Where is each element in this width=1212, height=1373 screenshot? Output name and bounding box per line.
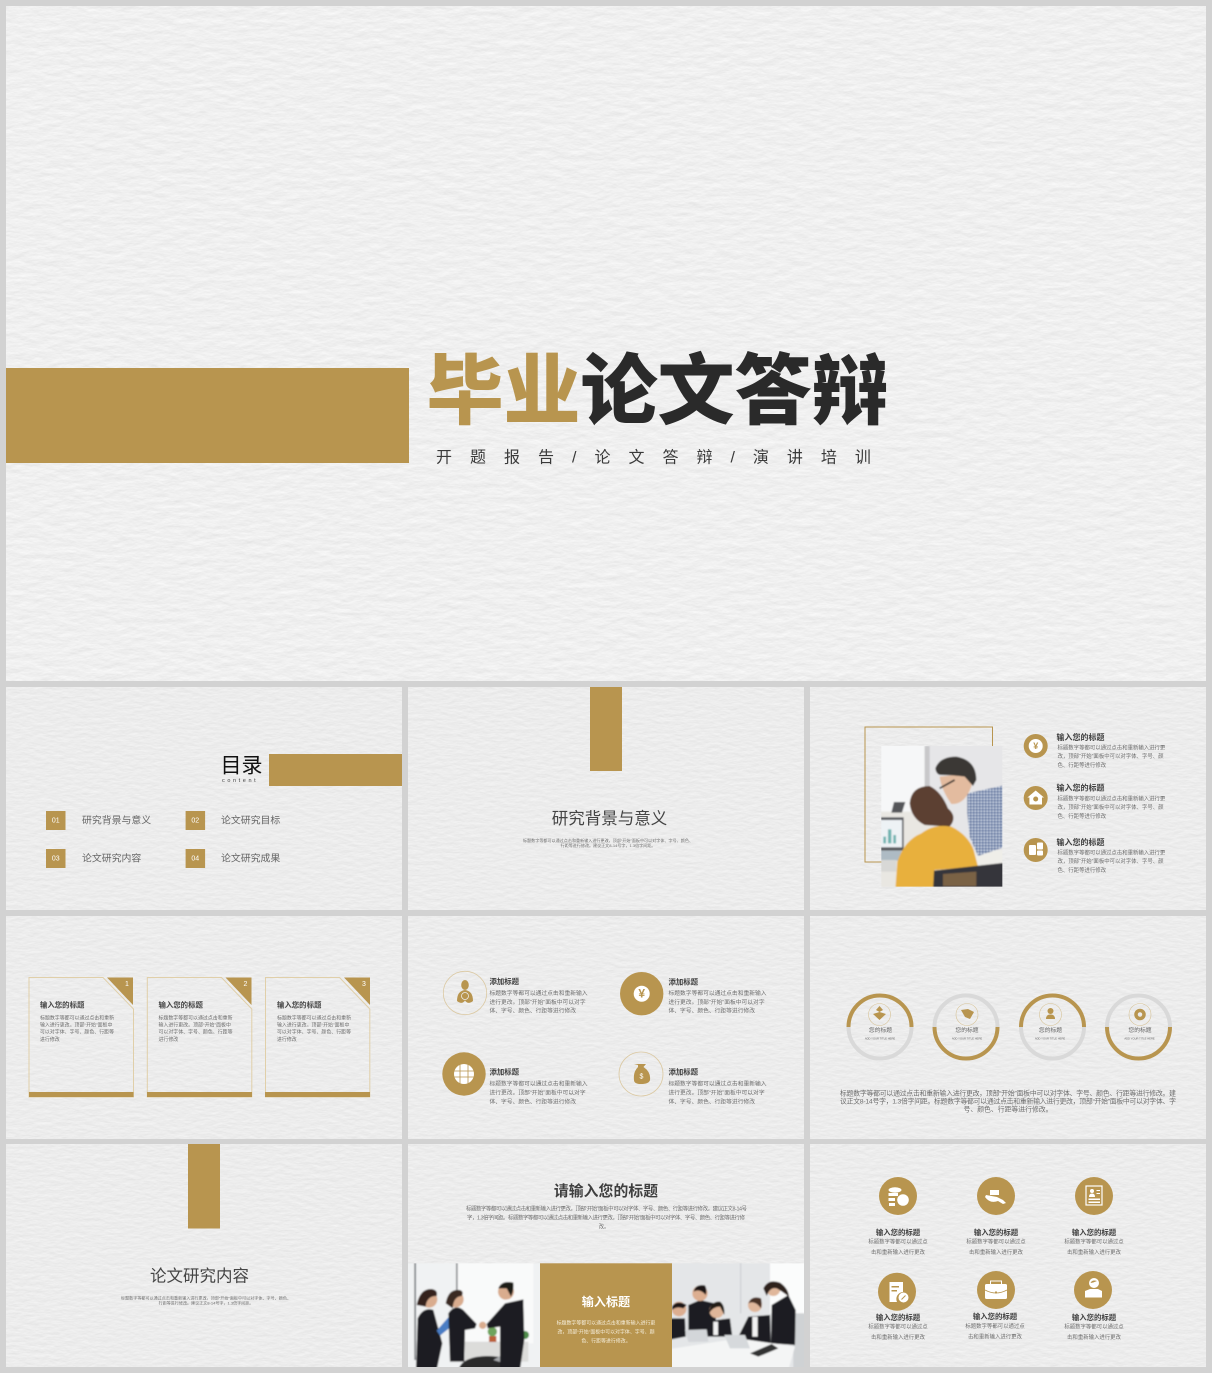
subtitle: 开题报告/论文答辩/演讲培训 [436,448,889,466]
point: person target: 进行更改。顶部“开始”面板中可以对字 [490,998,586,1006]
card 1: 可以对字体、字号、颜色、行距等 [40,1028,114,1036]
panel: three numbered cards [6,916,402,1139]
panel: cover slide [6,6,1206,681]
description text: 议正文8-14号字，1.3倍字间距。标题数字等都可以通过点击和重新输入进行更改，顶部“开始”面板中可以对字体、字 [840,1096,1176,1106]
item: coins: 击和重新输入进行更改 [871,1248,926,1256]
description: 标题数字等都可以通过点击和重新输入进行更改，顶部“开始”面板中可以对字体、字号、颜色、行距等进行修改。建议正文8-14号 [466,1204,748,1212]
point 1: 色、行距等进行修改 [1058,761,1107,769]
panel: photo with three points [810,687,1206,910]
photo: handshake [405,1260,543,1370]
item: person: 击和重新输入进行更改 [1067,1333,1122,1341]
photo: two people at a computer [878,743,1006,890]
item: briefcase [965,1271,1025,1340]
item 03: 03 [52,856,60,862]
heading: contents: 目录 [220,754,262,778]
point 3: 输入您的标题 [1056,837,1104,847]
point 2: 输入您的标题 [1056,782,1104,792]
section description [523,837,693,848]
panel: four icon points [408,916,804,1139]
section description [121,1294,291,1306]
item: coins [868,1177,928,1256]
card 1: 输入您的标题 [40,1000,85,1010]
point 2: 改，顶部“开始”面板中可以对字体、字号、颜 [1058,803,1164,811]
gold block [540,1263,672,1367]
point 1: ¥ [1033,741,1038,751]
card 3: 输入您的标题 [277,1000,322,1010]
point 2: 色、行距等进行修改 [1058,812,1107,820]
point: yen: 进行更改。顶部“开始”面板中可以对字 [668,998,765,1006]
item 01: 01 [52,818,60,824]
section heading: 研究背景与意义 [552,809,667,828]
card 2: 标题数字等都可以通过点击和重新 [158,1014,233,1022]
ring 3: 您的标题 [1039,1026,1062,1034]
gold vertical bar [590,687,622,771]
card 2: 2 [244,981,248,988]
item: briefcase: 输入您的标题 [973,1312,1018,1321]
point: person target: 体、字号、颜色、行距等进行修改 [490,1006,576,1014]
point 1: 标题数字等都可以通过点击和重新输入进行更 [1058,744,1166,752]
item: profile document: 输入您的标题 [1072,1228,1117,1237]
item: hand with coins: 击和重新输入进行更改 [969,1248,1024,1256]
section description: 标题数字等都可以通过点击和重新输入进行更改，顶部“开始”面板中可以对字体、字号、颜色、 [523,837,693,843]
card 2: 输入进行更改。顶部“开始”面板中 [158,1022,231,1028]
point: money bag: $ [640,1074,644,1080]
panel: section research content [6,1144,402,1367]
item: hand with coins: 标题数字等都可以通过点 [966,1238,1026,1246]
section description: 行距等进行修改。建议正文8-14号字，1.3倍字间距。 [159,1300,253,1306]
item: profile document [1064,1177,1124,1256]
point 1: 输入您的标题 [1056,732,1104,742]
item 04 [186,849,280,868]
card 2: 输入您的标题 [158,1000,203,1010]
item 03: 论文研究内容 [82,852,141,864]
description [466,1204,748,1230]
description text [840,1088,1176,1114]
point 1: 改，顶部“开始”面板中可以对字体、字号、颜 [1058,752,1164,760]
card 1 [29,978,134,1097]
item: document badge: 击和重新输入进行更改 [871,1333,926,1341]
item: profile document: 标题数字等都可以通过点 [1064,1238,1124,1246]
ring 4 [1107,996,1170,1058]
point: money bag: 体、字号、颜色、行距等进行修改 [668,1098,755,1106]
card 3: 进行修改 [277,1036,297,1043]
card 2: 可以对字体、字号、颜色、行距等 [158,1028,233,1036]
point: person target: 添加标题 [490,977,520,986]
point 1 [1024,732,1166,769]
description: 字，1.3倍字间距。标题数字等都可以通过点击和重新输入进行更改，顶部“开始”面板中可以对字体、字号、颜色、行距等进行修 [467,1214,746,1222]
point 3 [1024,837,1166,874]
card 1: 1 [125,981,129,988]
item: document badge: 输入您的标题 [876,1313,921,1322]
item: person [1064,1271,1124,1341]
point: money bag: 添加标题 [668,1068,699,1076]
gold block: 色、行距等进行修改。 [581,1338,631,1344]
item 02 [186,811,280,830]
point 3: 色、行距等进行修改 [1058,866,1107,874]
item: person: 输入您的标题 [1072,1313,1117,1322]
item 04: 论文研究成果 [221,852,280,864]
card 3 [265,978,370,1097]
title: 毕业论文答辩 [426,349,888,435]
ring 3: ADD YOUR TITLE HERE [1035,1036,1065,1040]
point: globe: 体、字号、颜色、行距等进行修改 [490,1098,576,1106]
ring 1: ADD YOUR TITLE HERE [865,1036,895,1040]
item: briefcase: 击和重新输入进行更改 [968,1332,1023,1340]
item 01 [46,811,151,830]
point 3: 标题数字等都可以通过点击和重新输入进行更 [1058,848,1166,856]
point 2 [1024,782,1166,820]
card 1: 输入进行更改。顶部“开始”面板中 [40,1022,112,1028]
section heading: 论文研究内容 [150,1266,249,1286]
photo: team meeting [672,1264,804,1367]
heading: content subtitle: content [222,778,258,784]
ring 2: ADD YOUR TITLE HERE [952,1036,982,1040]
item: hand with coins: 输入您的标题 [974,1228,1019,1237]
description: 改。 [599,1222,609,1230]
point: yen [620,972,767,1015]
gold header bar [269,754,402,786]
panel: table of contents [6,687,402,910]
panel: title with photos [405,1144,807,1370]
gold bar [6,368,409,463]
item 04: 04 [191,856,199,862]
description text: 标题数字等都可以通过点击和重新输入进行更改，顶部“开始”面板中可以对字体、字号、颜色、行距等进行修改。建 [840,1088,1176,1098]
point: globe: 进行更改。顶部“开始”面板中可以对字 [490,1088,586,1096]
panel: section research background [408,687,804,910]
item 03 [46,849,141,868]
ring 4: ADD YOUR TITLE HERE [1124,1036,1155,1040]
gold block: 改，顶部“开始”面板中可以对字体、字号、颜 [557,1328,655,1336]
card 3: 输入进行更改。顶部“开始”面板中 [277,1022,349,1028]
description text: 号、颜色、行距等进行修改。 [964,1104,1052,1114]
point: globe: 标题数字等都可以通过点击和重新输入 [490,1080,588,1088]
card 3: 可以对字体、字号、颜色、行距等 [277,1028,351,1036]
item: document badge: 标题数字等都可以通过点 [868,1322,928,1330]
card 1: 标题数字等都可以通过点击和重新 [40,1014,114,1022]
point: person target: 标题数字等都可以通过点击和重新输入 [490,989,588,997]
section description: 标题数字等都可以通过点击和重新输入进行更改，顶部“开始”面板中可以对字体、字号、颜色、 [121,1294,291,1300]
ring 2: 您的标题 [955,1026,979,1034]
item 02: 论文研究目标 [221,814,280,826]
ring 3 [1021,996,1084,1058]
point 2: 标题数字等都可以通过点击和重新输入进行更 [1058,794,1166,802]
item: coins: 标题数字等都可以通过点 [868,1238,928,1246]
gold vertical bar [188,1144,220,1228]
ring 1 [848,996,912,1058]
point: person target [443,971,588,1015]
card 3: 标题数字等都可以通过点击和重新 [277,1014,351,1022]
item: document badge [868,1273,928,1341]
gold block: 标题数字等都可以通过点击和重新输入进行更 [557,1320,655,1326]
item 02: 02 [191,818,199,824]
point: yen: ¥ [638,986,645,1000]
panel: six icon points [810,1144,1206,1367]
point: money bag [619,1052,767,1106]
ring 2 [934,996,998,1058]
item 01: 研究背景与意义 [82,814,151,826]
item: coins: 输入您的标题 [876,1228,921,1237]
point: yen: 标题数字等都可以通过点击和重新输入 [668,989,767,997]
point: money bag: 标题数字等都可以通过点击和重新输入 [668,1080,767,1088]
item: person: 标题数字等都可以通过点 [1064,1322,1124,1330]
heading: 请输入您的标题 [554,1182,658,1200]
point: globe [442,1052,588,1106]
point: money bag: 进行更改。顶部“开始”面板中可以对字 [668,1088,765,1096]
panel: four rings [810,916,1206,1139]
card 1: 进行修改 [40,1036,60,1043]
ring 1: 您的标题 [869,1026,892,1034]
section description: 行距等进行修改。建议正文8-14号字，1.3倍字间距。 [561,842,655,848]
point 3: 改，顶部“开始”面板中可以对字体、字号、颜 [1058,857,1164,865]
item: profile document: 击和重新输入进行更改 [1067,1248,1122,1256]
card 2 [147,978,252,1097]
point: yen: 添加标题 [668,978,699,986]
item: briefcase: 标题数字等都可以通过点 [965,1322,1025,1330]
photo frame [865,727,992,862]
ring 4: 您的标题 [1128,1026,1152,1034]
card 3: 3 [362,981,366,988]
point: globe: 添加标题 [490,1068,520,1076]
gold block: 输入标题 [582,1294,630,1309]
point: yen: 体、字号、颜色、行距等进行修改 [668,1006,755,1014]
item: hand with coins [966,1177,1026,1256]
card 2: 进行修改 [158,1036,178,1043]
